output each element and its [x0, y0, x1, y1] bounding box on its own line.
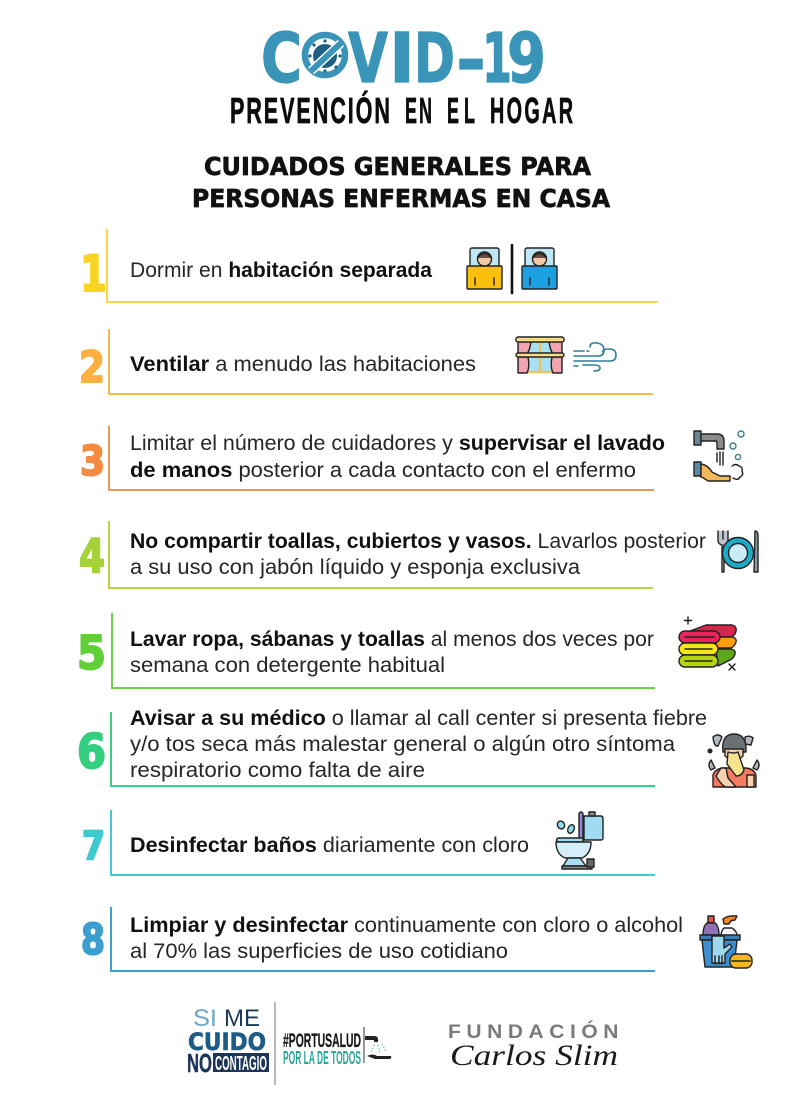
logo: Por tu salud: [283, 1027, 391, 1068]
logo: Fundación Carlos Slim: Carlos Slim: [450, 1039, 618, 1072]
icon: folded towels: [679, 617, 736, 670]
item 4: [79, 521, 758, 588]
title: COVID-19: V: [348, 19, 388, 99]
icon: virus crossed out as letter O: [305, 35, 345, 75]
logo: Si me cuido no contagio: CONTAGIO: [215, 1053, 267, 1075]
heading: [192, 152, 611, 213]
item 3: de manos posterior a cada contacto con el enfermo: [130, 458, 636, 482]
item 8: 8: [81, 915, 105, 964]
item 8: al 70% las superficies de uso cotidiano: [130, 939, 508, 963]
logo: Por tu salud: #PORTUSALUD: [283, 1031, 361, 1052]
subtitle: EN: [405, 91, 432, 132]
item 4: No compartir toallas, cubiertos y vasos. Lavarlos posterior: [130, 529, 706, 553]
item 3: [80, 426, 744, 490]
icon: wind: [574, 343, 616, 371]
item 7: Desinfectar baños diariamente con cloro: [130, 833, 529, 857]
icon: separate beds: [467, 245, 557, 293]
subtitle: HOGAR: [490, 92, 573, 132]
logo: Fundación Carlos Slim: FUNDACIÓN: [448, 1021, 624, 1043]
item 4: 4: [79, 529, 105, 583]
title: COVID-19: -: [456, 21, 486, 101]
item 7: 7: [82, 824, 105, 869]
logo divider: [274, 1002, 276, 1085]
icon: tap and washing hands: [694, 431, 744, 481]
logo: Si me cuido no contagio: CUIDO: [188, 1028, 266, 1056]
item 1: 1: [80, 245, 107, 303]
logo: Si me cuido no contagio: SI: [193, 1005, 217, 1032]
item 4: a su uso con jabón líquido y esponja exclusiva: [130, 555, 580, 579]
icon: window with curtains: [516, 337, 564, 373]
logo: Fundación Carlos Slim: [448, 1021, 624, 1072]
heading: PERSONAS ENFERMAS EN CASA: [192, 184, 611, 213]
heading: CUIDADOS GENERALES PARA: [204, 152, 592, 181]
icon: person coughing: [708, 734, 759, 787]
subtitle: EL: [447, 91, 475, 132]
icon: tap and hand: [365, 1036, 391, 1059]
logo: Por tu salud: POR LA DE TODOS: [283, 1048, 361, 1068]
item 2: 2: [79, 343, 105, 393]
subtitle: [230, 90, 573, 132]
item 6: [77, 706, 759, 787]
icon: plate and cutlery: [718, 531, 758, 572]
item 5: Lavar ropa, sábanas y toallas al menos dos veces por: [130, 627, 654, 651]
subtitle: PREVENCIÓN: [230, 90, 390, 131]
item 8: Limpiar y desinfectar continuamente con cloro o alcohol: [130, 913, 683, 937]
title: COVID-19: 1: [482, 19, 512, 99]
icon: cleaning bucket: [700, 916, 752, 968]
item 7: [82, 810, 655, 875]
icon: toilet: [556, 812, 603, 869]
title: COVID-19: [261, 19, 546, 101]
item 2: Ventilar a menudo las habitaciones: [130, 352, 476, 376]
item 6: respiratorio como falta de aire: [130, 758, 425, 782]
title: COVID-19: D: [414, 19, 455, 99]
item 8: [81, 907, 752, 971]
title: COVID-19: 9: [507, 19, 546, 99]
logo: Si me cuido no contagio: NO: [187, 1048, 212, 1078]
item 5: [77, 613, 736, 688]
title: COVID-19: I: [389, 19, 415, 99]
item 6: y/o tos seca más malestar general o algún otro síntoma: [130, 732, 675, 756]
title: COVID-19: C: [261, 19, 302, 99]
item 2: [79, 329, 653, 394]
item 5: 5: [77, 626, 106, 680]
logo: Si me cuido no contagio: [187, 1005, 269, 1078]
item 6: 6: [77, 725, 106, 780]
item 1: Dormir en habitación separada: [130, 258, 433, 282]
item 3: 3: [80, 437, 105, 485]
item 6: Avisar a su médico o llamar al call center si presenta fiebre: [130, 706, 707, 730]
item 3: Limitar el número de cuidadores y supervisar el lavado: [130, 431, 665, 455]
logo: Si me cuido no contagio: ME: [224, 1005, 260, 1032]
item 5: semana con detergente habitual: [130, 653, 445, 677]
item 1: [80, 229, 658, 303]
